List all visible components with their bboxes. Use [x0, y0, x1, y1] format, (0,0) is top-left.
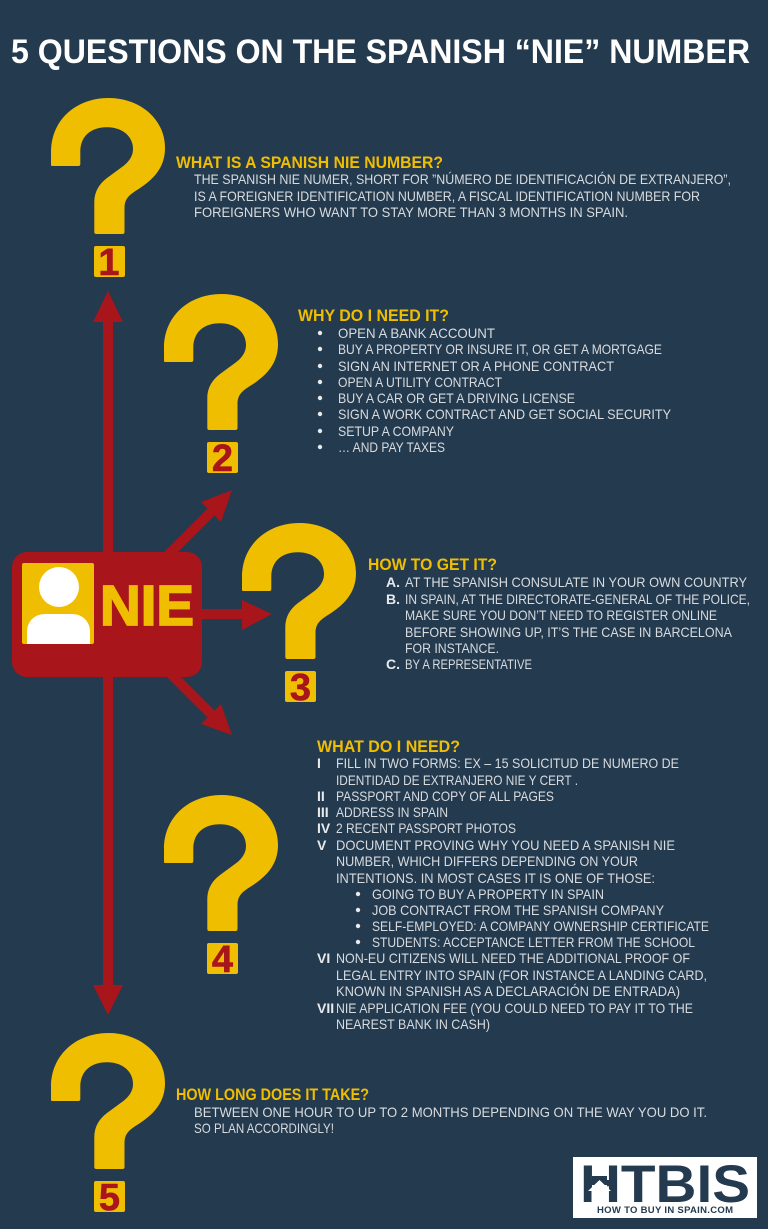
heading: WHY DO I NEED IT? — [298, 307, 449, 325]
heading: WHAT DO I NEED? — [317, 738, 460, 756]
numbered requirements list: V — [317, 837, 327, 853]
body text: IS A FOREIGNER IDENTIFICATION NUMBER, A FISCAL IDENTIFICATION NUMBER FOR — [194, 188, 700, 204]
question mark 4: 4 — [212, 939, 233, 981]
icon: house in the H — [588, 1163, 611, 1203]
bullet list: SETUP A COMPANY — [338, 423, 455, 439]
numbered requirements list: ADDRESS IN SPAIN — [336, 804, 448, 820]
question mark 5 — [51, 1033, 165, 1219]
numbered requirements list: GOING TO BUY A PROPERTY IN SPAIN — [372, 886, 604, 902]
lettered list: B. — [386, 591, 400, 607]
arrow: up to question 1 and down to question 5 — [93, 291, 123, 1015]
heading: WHAT IS A SPANISH NIE NUMBER? — [176, 154, 443, 172]
panel: why do I need it — [298, 307, 672, 455]
body text: SO PLAN ACCORDINGLY! — [194, 1120, 334, 1136]
question mark 2: 2 — [212, 438, 233, 480]
lettered list: MAKE SURE YOU DON’T NEED TO REGISTER ONLINE — [405, 607, 717, 623]
question mark 3 — [242, 523, 356, 709]
numbered requirements list: KNOWN IN SPANISH AS A DECLARACIÓN DE ENTRADA) — [336, 983, 680, 999]
numbered requirements list: IV — [317, 820, 331, 836]
panel: what is a NIE number — [176, 154, 731, 220]
NIE identity card — [12, 552, 202, 677]
numbered requirements list: FILL IN TWO FORMS: EX – 15 SOLICITUD DE NUMERO DE — [336, 755, 679, 771]
numbered requirements list: NEAREST BANK IN CASH) — [336, 1016, 490, 1032]
body text: FOREIGNERS WHO WANT TO STAY MORE THAN 3 MONTHS IN SPAIN. — [194, 204, 628, 220]
lettered list: BEFORE SHOWING UP, IT’S THE CASE IN BARCELONA — [405, 624, 733, 640]
numbered requirements list: DOCUMENT PROVING WHY YOU NEED A SPANISH NIE — [336, 837, 675, 853]
numbered requirements list: 2 RECENT PASSPORT PHOTOS — [336, 820, 516, 836]
numbered requirements list — [317, 755, 709, 1032]
lettered list: BY A REPRESENTATIVE — [405, 656, 532, 672]
bullet list: SIGN A WORK CONTRACT AND GET SOCIAL SECURITY — [338, 406, 672, 422]
question mark 4 — [164, 795, 278, 981]
numbered requirements list: I — [317, 755, 321, 771]
body text — [194, 171, 731, 220]
heading: HOW TO GET IT? — [368, 556, 497, 574]
numbered requirements list: JOB CONTRACT FROM THE SPANISH COMPANY — [372, 902, 665, 918]
logo wordmark: HTBIS — [580, 1155, 750, 1214]
numbered requirements list: STUDENTS: ACCEPTANCE LETTER FROM THE SCHOOL — [372, 934, 695, 950]
question mark 3: 3 — [290, 667, 311, 709]
arrow: to question 2 — [158, 490, 232, 558]
numbered requirements list: VI — [317, 950, 330, 966]
question mark 1: 1 — [98, 242, 120, 284]
bullet list: OPEN A BANK ACCOUNT — [338, 325, 495, 341]
bullet list: OPEN A UTILITY CONTRACT — [338, 374, 502, 390]
numbered requirements list: NON-EU CITIZENS WILL NEED THE ADDITIONAL PROOF OF — [336, 950, 690, 966]
arrows from NIE card — [93, 291, 272, 1015]
numbered requirements list: SELF-EMPLOYED: A COMPANY OWNERSHIP CERTIFICATE — [372, 918, 709, 934]
lettered list — [386, 574, 750, 672]
numbered requirements list: II — [317, 788, 325, 804]
lettered list: FOR INSTANCE. — [405, 640, 499, 656]
panel: how long does it take — [176, 1086, 707, 1136]
lettered list: C. — [386, 656, 400, 672]
numbered requirements list: NUMBER, WHICH DIFFERS DEPENDING ON YOUR — [336, 853, 638, 869]
numbered requirements list: III — [317, 804, 329, 820]
numbered requirements list: LEGAL ENTRY INTO SPAIN (FOR INSTANCE A LANDING CARD, — [336, 967, 707, 983]
question mark 5: 5 — [99, 1177, 120, 1219]
logo: HTBIS — [573, 1155, 757, 1218]
heading: HOW LONG DOES IT TAKE? — [176, 1086, 369, 1104]
body text: BETWEEN ONE HOUR TO UP TO 2 MONTHS DEPENDING ON THE WAY YOU DO IT. — [194, 1104, 707, 1120]
arrow: to question 3 — [195, 600, 272, 630]
question mark 2 — [164, 294, 278, 480]
bullet list: BUY A PROPERTY OR INSURE IT, OR GET A MORTGAGE — [338, 341, 662, 357]
bullet list: SIGN AN INTERNET OR A PHONE CONTRACT — [338, 358, 614, 374]
question mark 1 — [51, 98, 165, 284]
bullet list: … AND PAY TAXES — [338, 439, 445, 455]
arrow: to question 4 — [161, 671, 232, 735]
bullet list: BUY A CAR OR GET A DRIVING LICENSE — [338, 390, 575, 406]
numbered requirements list: PASSPORT AND COPY OF ALL PAGES — [336, 788, 554, 804]
numbered requirements list: INTENTIONS. IN MOST CASES IT IS ONE OF THOSE: — [336, 870, 655, 886]
numbered requirements list: NIE APPLICATION FEE (YOU COULD NEED TO PAY IT TO THE — [336, 1000, 693, 1016]
numbered requirements list: IDENTIDAD DE EXTRANJERO NIE Y CERT . — [336, 772, 578, 788]
body text — [194, 1104, 707, 1136]
card background — [12, 552, 202, 677]
lettered list: A. — [386, 574, 400, 590]
bullet list — [318, 325, 672, 455]
icon: person portrait — [22, 563, 94, 644]
card label: NIE — [100, 574, 194, 638]
panel: how to get it — [368, 556, 750, 672]
logo tagline: HOW TO BUY IN SPAIN.COM — [597, 1205, 733, 1216]
lettered list: AT THE SPANISH CONSULATE IN YOUR OWN COUNTRY — [405, 574, 748, 590]
numbered requirements list: VII — [317, 1000, 334, 1016]
panel: what do I need — [317, 738, 709, 1032]
